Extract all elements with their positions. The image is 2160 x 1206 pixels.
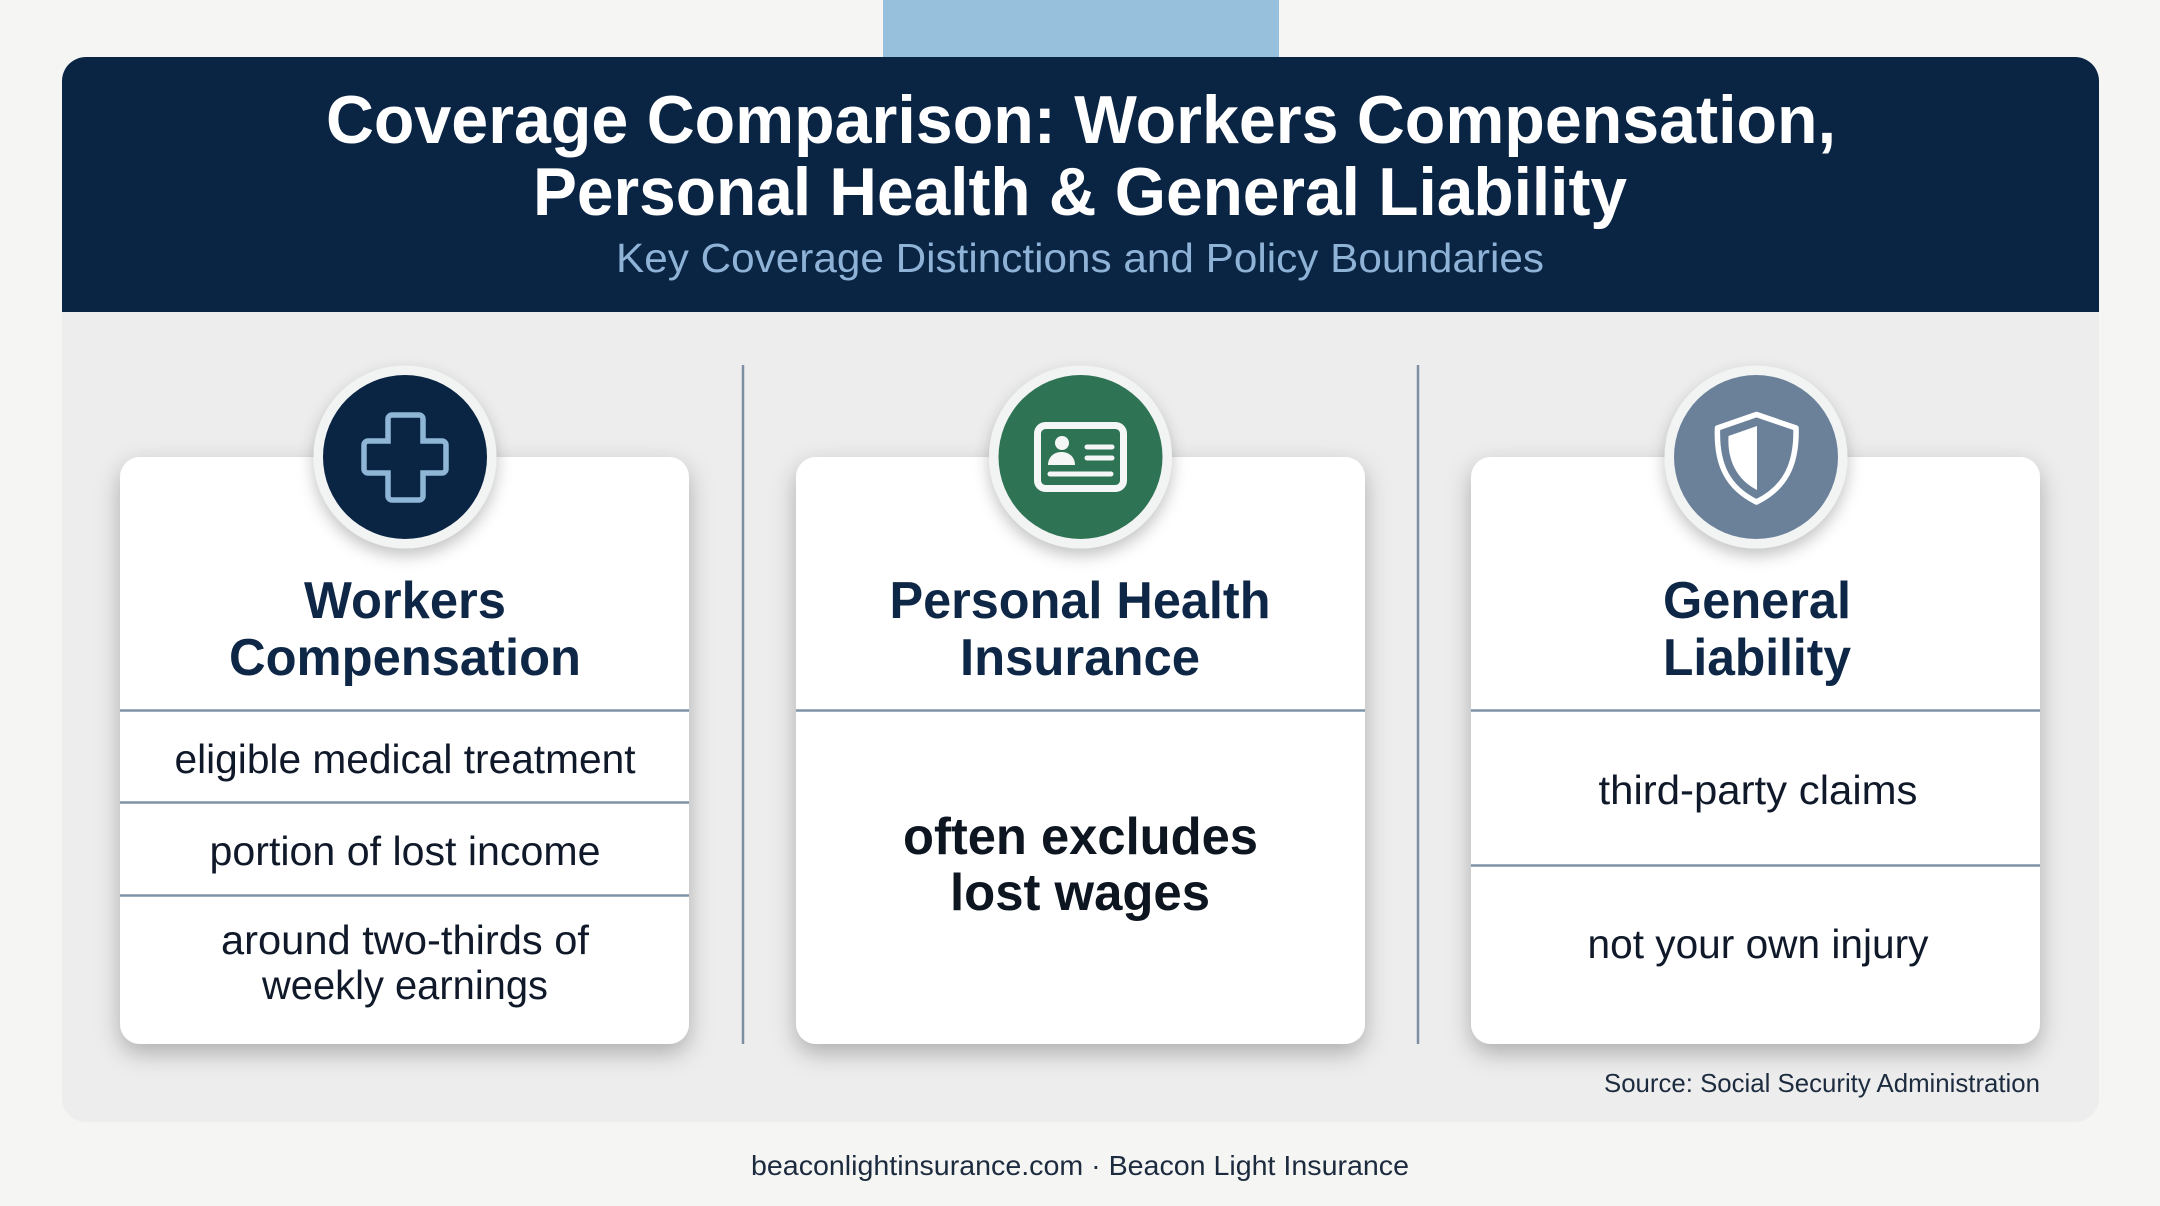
source note: Source: Social Security Administration — [1604, 1068, 2040, 1098]
callout: often excludes lost wages: often excludes — [903, 808, 1258, 866]
heading: general liability: Liability — [1663, 629, 1851, 687]
row: not your own injury: not your own injury — [1588, 921, 1929, 967]
row dividers — [1471, 710, 2040, 866]
subtitle: Key Coverage Distinctions and Policy Boundaries — [616, 235, 1544, 281]
row: portion of lost income: portion of lost income — [210, 828, 600, 874]
column dividers — [743, 365, 1418, 1044]
header banner — [62, 57, 2099, 312]
heading: general liability: General — [1663, 572, 1851, 630]
title: Coverage Comparison: Workers Compensation, — [326, 82, 1836, 158]
panel: personal health insurance — [796, 366, 1365, 1044]
row: around two-thirds of weekly earnings: around two-thirds of — [221, 917, 590, 963]
title — [326, 82, 1836, 230]
heading: personal health insurance — [890, 572, 1270, 687]
row: around two-thirds of weekly earnings — [221, 917, 590, 1008]
icon: medical cross — [314, 366, 496, 548]
heading: general liability — [1663, 572, 1851, 687]
footer: beaconlightinsurance.com · Beacon Light Insurance — [751, 1150, 1409, 1181]
row: around two-thirds of weekly earnings: weekly earnings — [261, 962, 548, 1008]
heading: workers compensation — [229, 572, 581, 687]
row dividers — [120, 710, 689, 896]
panel: general liability — [1471, 366, 2040, 1044]
heading: personal health insurance: Insurance — [960, 629, 1200, 687]
callout: often excludes lost wages: lost wages — [950, 864, 1210, 922]
heading: workers compensation: Compensation — [229, 629, 581, 687]
panel: workers compensation — [120, 366, 689, 1044]
row: third-party claims: third-party claims — [1598, 767, 1918, 813]
heading: personal health insurance: Personal Health — [890, 572, 1270, 630]
title: Personal Health & General Liability — [533, 154, 1627, 230]
heading: workers compensation: Workers — [304, 572, 506, 630]
row: eligible medical treatment: eligible medical treatment — [174, 736, 636, 782]
row divider — [796, 709, 1365, 712]
callout: often excludes lost wages — [903, 808, 1258, 922]
icon: shield — [1664, 366, 1848, 548]
top accent tab — [883, 0, 1279, 58]
icon: id card — [989, 366, 1172, 548]
